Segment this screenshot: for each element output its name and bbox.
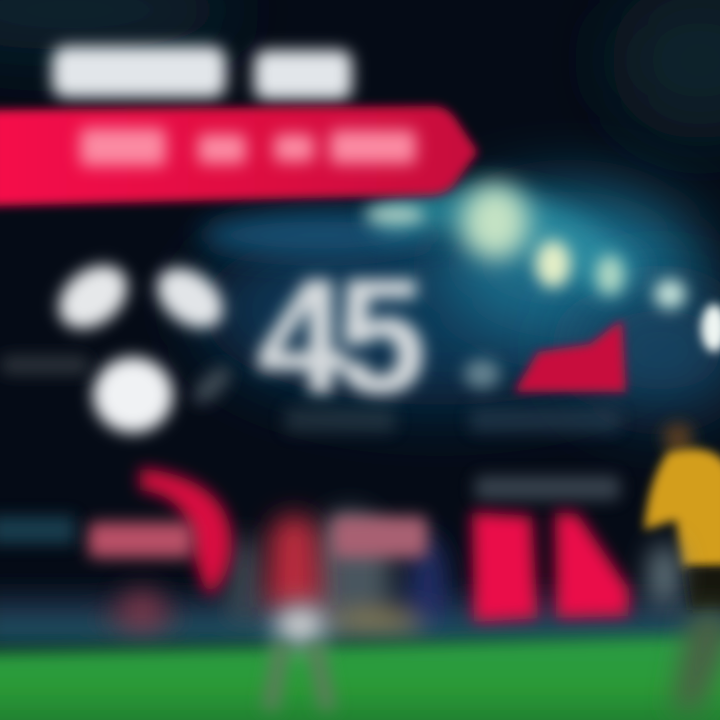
stat caption <box>470 408 620 432</box>
red banner <box>0 106 478 206</box>
chart heading <box>475 476 620 500</box>
red bar chart <box>472 512 630 622</box>
donut label <box>88 522 193 558</box>
stat icon <box>464 359 500 389</box>
icon: ball bottom <box>93 357 173 433</box>
banner text <box>80 128 416 166</box>
player in red <box>266 514 328 710</box>
pitch <box>0 634 720 720</box>
icon: motion streaks <box>0 356 237 410</box>
central label <box>332 516 428 558</box>
crowd <box>0 510 720 646</box>
red area chart <box>514 320 626 392</box>
small label <box>122 590 162 632</box>
left teal marks <box>0 516 75 544</box>
icon: ball top right <box>145 256 235 340</box>
title <box>52 46 352 100</box>
number caption <box>285 408 395 432</box>
arc of stadium lights <box>365 184 720 352</box>
icon: ball top left <box>46 252 140 342</box>
big number: 45 <box>257 246 422 427</box>
player in yellow <box>644 423 720 710</box>
red donut chart <box>140 468 232 596</box>
